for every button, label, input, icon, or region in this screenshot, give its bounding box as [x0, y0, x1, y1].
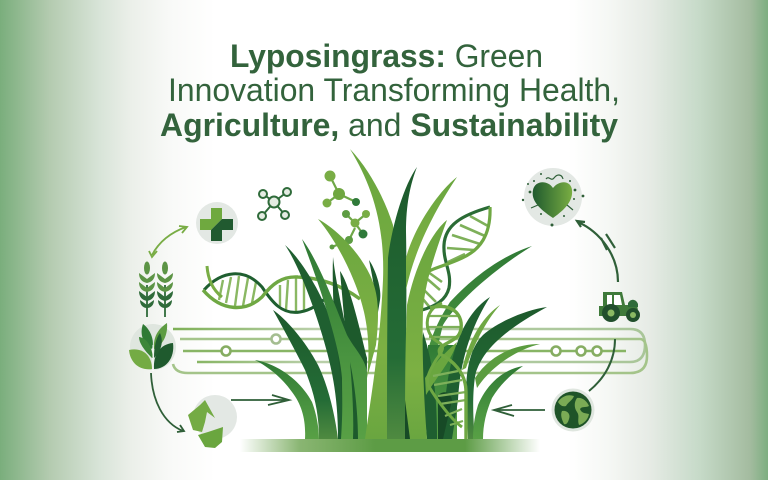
blade: center right light — [405, 220, 447, 439]
arrow: wheat to cross — [149, 226, 187, 257]
blade: back dark two — [340, 271, 367, 439]
blade: right low — [473, 366, 523, 439]
blade: lower dark center left — [350, 362, 358, 439]
blade: center light — [350, 149, 405, 439]
icon: outline molecule — [258, 188, 291, 220]
title: Lyposingrass: Green — [230, 38, 543, 74]
blade: thin dark gap — [405, 400, 410, 439]
blade: far left — [273, 310, 338, 439]
blade: right cluster very dark — [438, 392, 452, 439]
blade: right cluster dark — [422, 332, 437, 439]
blade: back dark three — [369, 260, 380, 318]
ground bar — [240, 439, 540, 452]
icon: wheat — [139, 262, 173, 317]
grass blades — [255, 149, 547, 439]
icon: leaf circle — [129, 323, 176, 371]
DNA helix left — [203, 266, 360, 312]
DNA helix lower — [426, 303, 466, 439]
blade: right mid — [475, 344, 540, 388]
blade: right base mid — [427, 345, 457, 439]
icon: medical cross — [196, 202, 238, 244]
blade: back dark — [333, 257, 358, 439]
blade: center dark — [387, 167, 417, 439]
icon: globe — [552, 388, 594, 432]
icon: recycle circle — [188, 395, 237, 448]
blade: dark left — [285, 245, 343, 439]
arrow: globe to grass — [494, 405, 545, 416]
blade: right small light — [462, 305, 500, 370]
blade: mid left — [302, 239, 367, 439]
blade: left light — [318, 219, 378, 378]
blade: right dark — [466, 307, 547, 439]
pipeline lines — [173, 329, 647, 373]
icon: tractor — [599, 292, 640, 322]
DNA helix upper right — [422, 207, 490, 310]
title — [160, 38, 620, 143]
blade: right small dark — [440, 297, 490, 439]
title: Agriculture, and Sustainability — [160, 107, 618, 143]
arrow: tractor to heart — [577, 221, 618, 282]
blade: right light tall — [406, 177, 457, 290]
arrow: leaf to recycle — [151, 373, 184, 432]
blade: right big — [423, 246, 532, 439]
arrow: recycle to grass — [231, 395, 289, 405]
icon: green molecules — [322, 170, 370, 250]
blade: lowest left — [255, 360, 319, 439]
icon: heart circle — [522, 168, 584, 226]
blade: cluster light — [425, 342, 457, 395]
arrow: globe to tractor line — [589, 339, 615, 391]
title: Innovation Transforming Health, — [168, 72, 620, 108]
